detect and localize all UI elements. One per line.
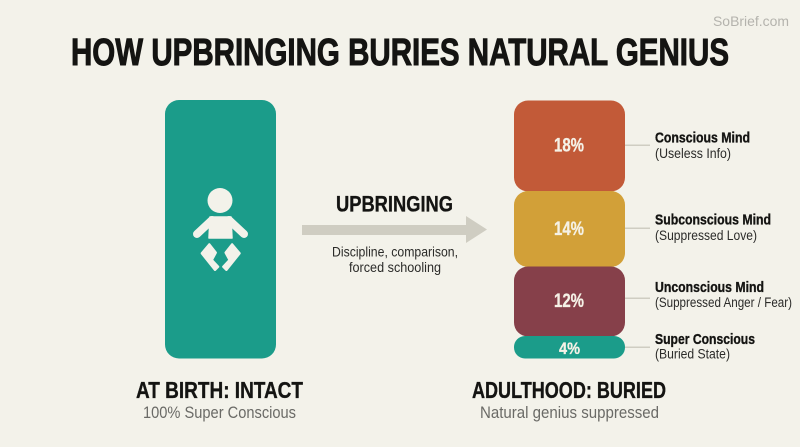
label: super conscious: Super Conscious xyxy=(655,331,755,348)
segment: super conscious 4% xyxy=(514,336,625,358)
panel: adulthood stack xyxy=(514,100,625,358)
segment: subconscious 14%: 14% xyxy=(554,219,584,240)
label: subconscious mind: Subconscious Mind xyxy=(655,212,771,228)
label: super conscious: (Buried State) xyxy=(655,346,730,362)
label: unconscious mind: Unconscious Mind xyxy=(655,279,764,296)
heading: upbringing: UPBRINGING xyxy=(336,192,453,216)
panel: at birth xyxy=(165,100,276,358)
caption: adulthood xyxy=(472,377,666,422)
segment: conscious 18%: 18% xyxy=(554,136,584,156)
caption: at birth xyxy=(136,377,303,422)
label: conscious mind: Conscious Mind xyxy=(655,130,750,146)
segment: unconscious 12% xyxy=(514,266,625,336)
text: upbringing description: forced schooling xyxy=(349,259,441,275)
caption: at birth: AT BIRTH: INTACT xyxy=(136,377,303,403)
icon: baby xyxy=(197,188,244,270)
caption: adulthood: ADULTHOOD: BURIED xyxy=(472,377,666,403)
label: conscious mind: (Useless Info) xyxy=(655,146,731,161)
segment: conscious 18% xyxy=(514,100,625,192)
label: unconscious mind xyxy=(625,279,792,310)
label: subconscious mind: (Suppressed Love) xyxy=(655,228,757,243)
text: upbringing description: Discipline, comparison, xyxy=(332,244,458,260)
segment: unconscious 12%: 12% xyxy=(554,291,584,312)
arrow xyxy=(302,216,487,243)
caption: at birth: 100% Super Conscious xyxy=(143,404,296,422)
caption: adulthood: Natural genius suppressed xyxy=(480,404,659,422)
label: conscious mind xyxy=(625,130,750,161)
segment: subconscious 14% xyxy=(514,191,625,267)
teal intact bar xyxy=(165,100,276,358)
text: upbringing description xyxy=(332,244,458,275)
watermark: SoBrief.com xyxy=(713,13,789,29)
label: subconscious mind xyxy=(625,212,771,243)
label: super conscious xyxy=(625,331,755,362)
segment: super conscious 4%: 4% xyxy=(559,339,580,358)
